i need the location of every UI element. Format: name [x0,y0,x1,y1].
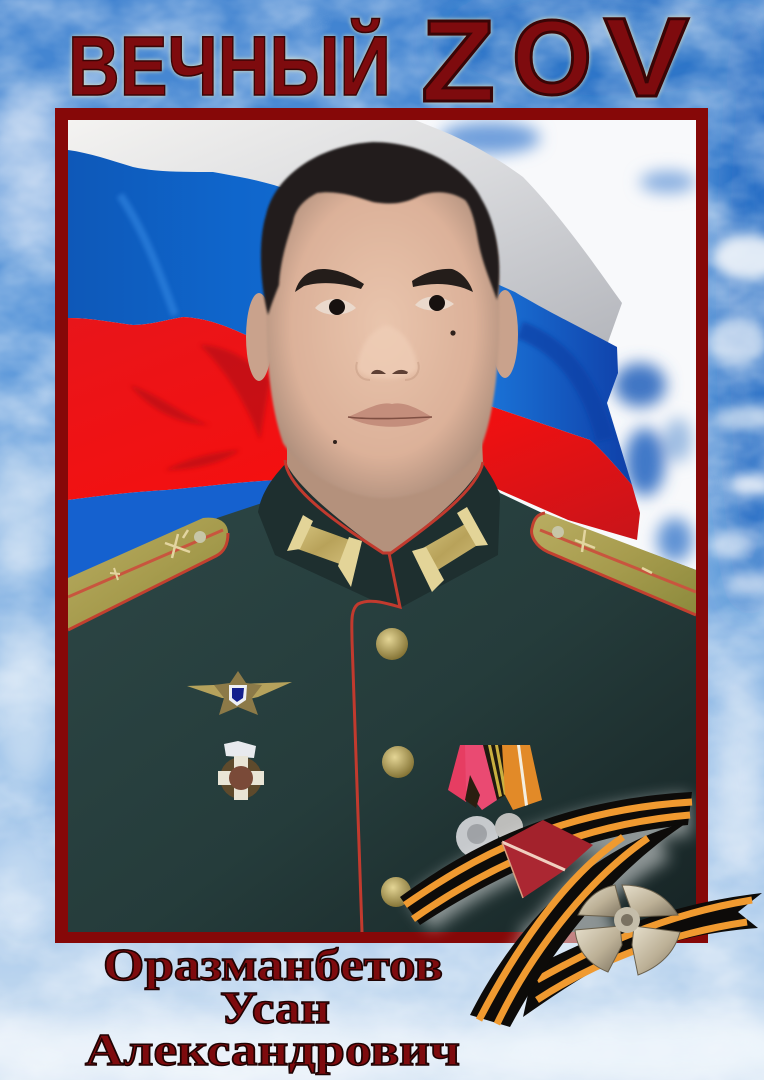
st george ribbon z [400,792,762,1027]
eyes [315,299,356,315]
red collar piping [285,460,483,932]
right shoulder board [532,513,696,615]
russian flag [68,120,640,590]
nose [356,325,419,380]
neck [287,440,483,553]
title word: vechny: ВЕЧНЫЙ [68,19,391,113]
title [68,0,689,126]
badge: wings class 3 [187,671,292,715]
tunic buttons [376,628,414,907]
collar tab left [287,515,362,587]
collar [258,462,500,608]
surname: Оразманбетов [103,940,443,990]
ribbon right band [523,893,762,1017]
mouth [348,403,432,427]
patronymic: Александрович [85,1025,460,1075]
title letters: zov [421,0,689,126]
portrait photo [68,120,696,932]
ears [246,290,518,381]
ribbon top band [400,792,692,925]
hair [261,142,499,315]
photo sky and clouds [436,120,696,567]
red medal ribbon [502,820,593,898]
cross of order [575,885,680,975]
eyebrows [295,269,364,292]
moles [333,330,456,444]
left shoulder board [68,518,228,630]
ribbon glow [420,815,690,1015]
badge: cross [218,741,264,800]
portrait frame [55,108,708,943]
name [85,940,460,1075]
title letters: zov: O [512,0,592,117]
ribbon diagonal band [470,822,688,1027]
medal ribbons [448,745,542,858]
face [261,142,499,498]
collar tab right [412,507,488,592]
tunic [68,465,696,932]
first name: Усан [220,983,330,1033]
